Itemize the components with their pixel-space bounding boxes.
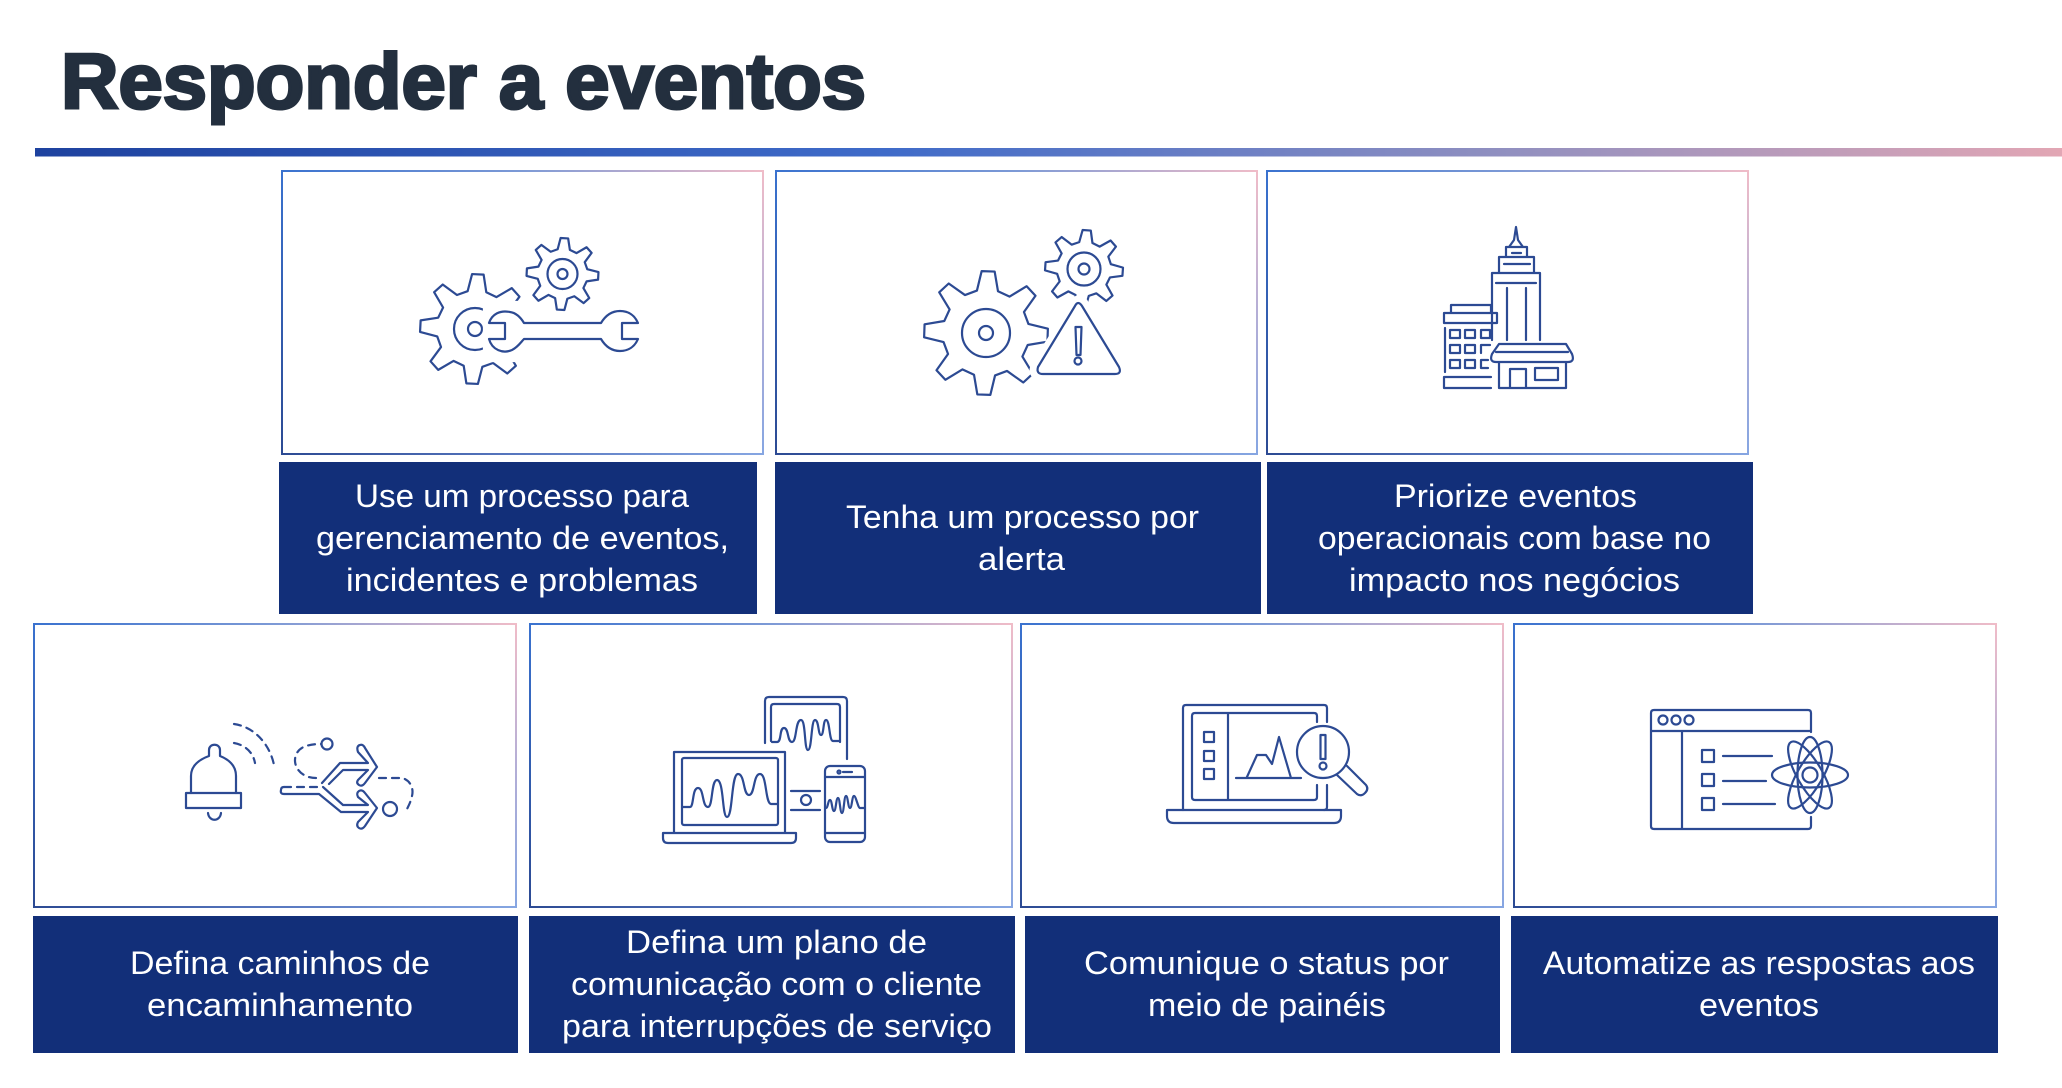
caption text: Priorize eventos bbox=[1394, 478, 1637, 514]
caption text: Defina um plano de bbox=[626, 924, 927, 960]
panel: one process per alert bbox=[775, 170, 1261, 614]
caption text bbox=[1084, 945, 1449, 1023]
caption box bbox=[279, 462, 757, 614]
caption box bbox=[33, 916, 518, 1053]
caption text: Comunique o status por bbox=[1084, 945, 1449, 981]
panel: event management process bbox=[279, 170, 764, 614]
caption text: incidentes e problemas bbox=[346, 562, 698, 598]
card frame bbox=[1513, 623, 1997, 908]
caption text: alerta bbox=[978, 541, 1065, 577]
caption text bbox=[1318, 478, 1711, 598]
panel: routing paths bbox=[33, 623, 518, 1053]
icon: gears and wrench bbox=[417, 236, 638, 387]
caption text: meio de painéis bbox=[1148, 987, 1386, 1023]
panel: automate responses bbox=[1511, 623, 1998, 1053]
card frame bbox=[33, 623, 517, 908]
card frame bbox=[775, 170, 1258, 455]
caption text bbox=[1543, 945, 1975, 1023]
card frame bbox=[1266, 170, 1749, 455]
caption text bbox=[846, 499, 1199, 577]
card frame bbox=[281, 170, 764, 455]
caption box bbox=[1511, 916, 1998, 1053]
card frame bbox=[529, 623, 1013, 908]
caption text: eventos bbox=[1699, 987, 1819, 1023]
caption box bbox=[775, 462, 1261, 614]
caption text bbox=[130, 945, 430, 1023]
card frame bbox=[1020, 623, 1504, 908]
caption text: impacto nos negócios bbox=[1349, 562, 1680, 598]
icon: gears and warning triangle bbox=[922, 228, 1125, 397]
caption box bbox=[1267, 462, 1753, 614]
caption text: Defina caminhos de bbox=[130, 945, 430, 981]
title: Responder a eventos bbox=[61, 37, 866, 125]
panel: prioritize by business impact bbox=[1266, 170, 1753, 614]
caption text: comunicação com o cliente bbox=[571, 966, 982, 1002]
caption text: operacionais com base no bbox=[1318, 520, 1711, 556]
caption text bbox=[562, 924, 992, 1044]
caption text bbox=[316, 478, 729, 598]
caption text: gerenciamento de eventos, bbox=[316, 520, 729, 556]
caption text: encaminhamento bbox=[147, 987, 413, 1023]
caption text: Use um processo para bbox=[355, 478, 689, 514]
caption text: Tenha um processo por bbox=[846, 499, 1199, 535]
icon: laptop tablet and phone dashboards bbox=[663, 697, 865, 843]
icon: city buildings bbox=[1444, 227, 1573, 388]
panel: customer communication plan bbox=[529, 623, 1015, 1053]
caption text: para interrupções de serviço bbox=[562, 1008, 992, 1044]
caption text: Automatize as respostas aos bbox=[1543, 945, 1975, 981]
icon: dashboard laptop with magnifier bbox=[1167, 705, 1367, 823]
icon: automation window with atom bbox=[1651, 710, 1848, 829]
caption box bbox=[529, 916, 1015, 1053]
title underline bar bbox=[35, 148, 2062, 156]
icon: bell and branching arrows bbox=[186, 724, 413, 829]
caption box bbox=[1025, 916, 1500, 1053]
panel: status dashboards bbox=[1020, 623, 1504, 1053]
